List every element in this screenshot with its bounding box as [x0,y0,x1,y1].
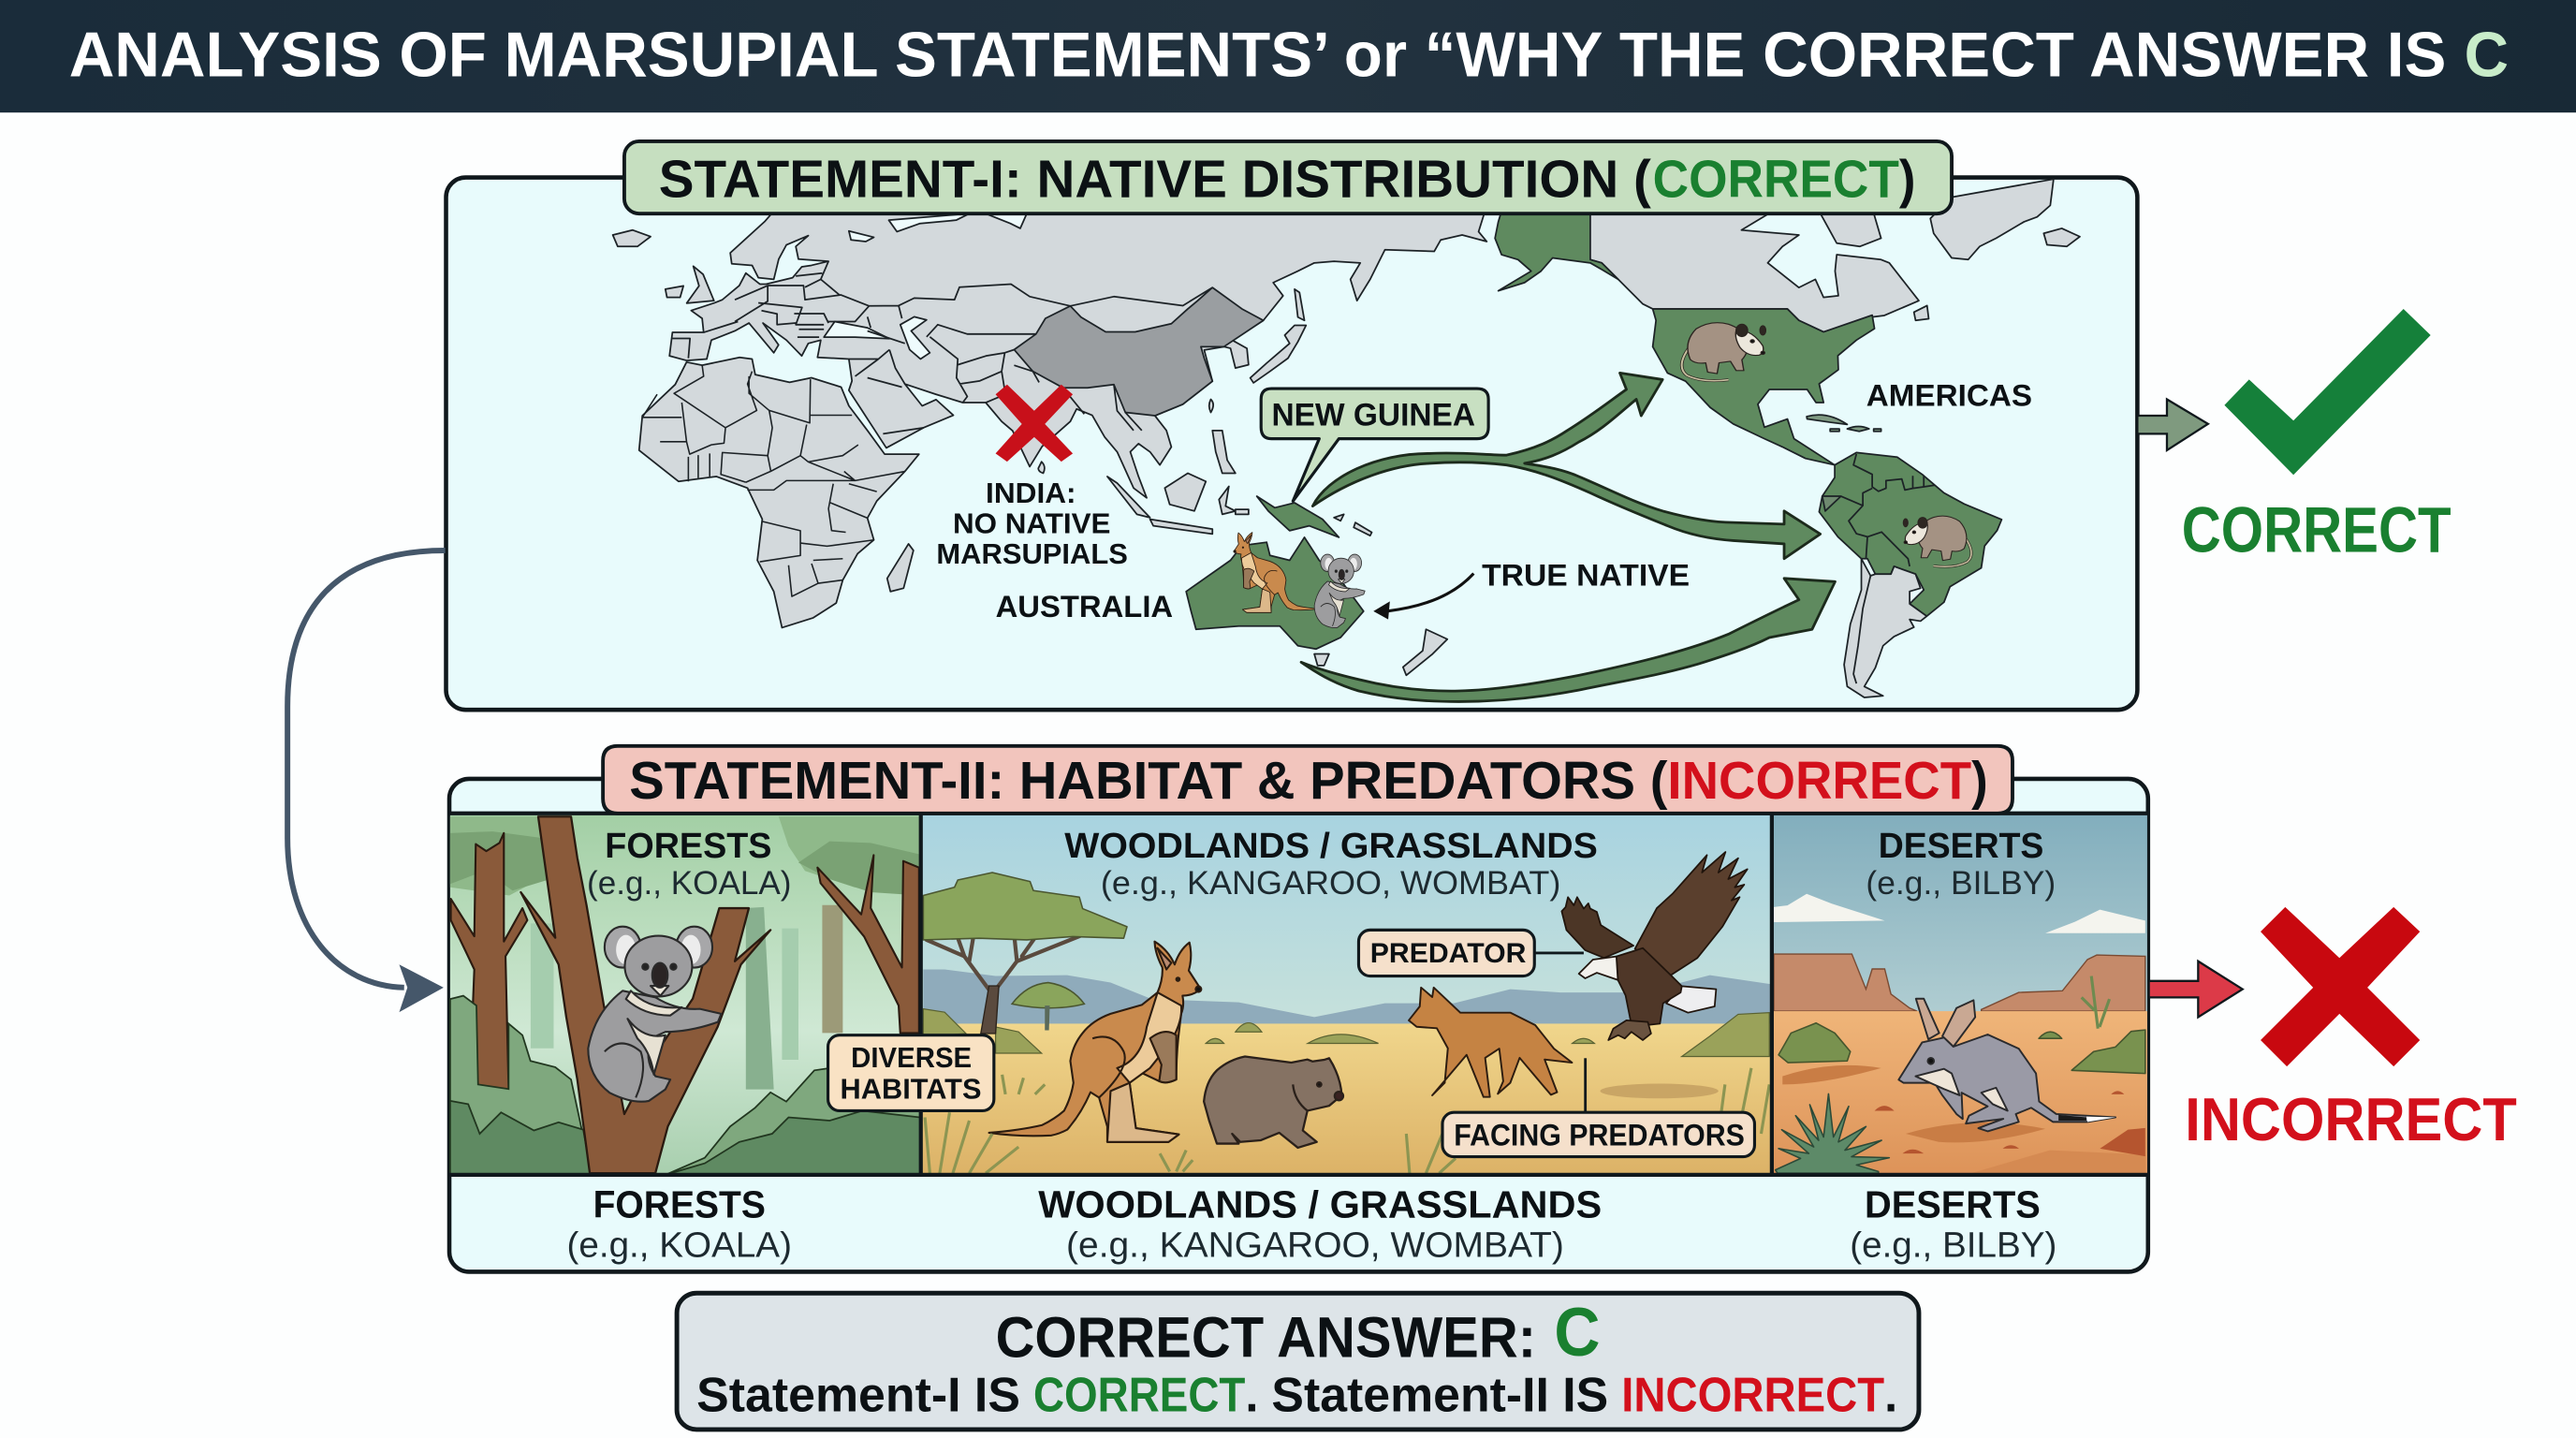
icon: red X [2261,907,2420,1066]
icon: India red X [996,385,1073,462]
icon: kangaroo on Australia [1234,533,1319,612]
caption: forests [567,1183,792,1265]
arrow: to correct [2137,399,2208,450]
map: Eurasia [669,205,1486,498]
forest: koala [588,927,721,1102]
icon: opossum on South America [1903,516,1971,566]
answer summary: CORRECT [1033,1368,1246,1422]
scene frame [449,814,2148,1175]
map: Canada [1577,205,1928,332]
desert: label: (e.g., BILBY) [1866,865,2056,902]
woodland: shrubs and dry patches [923,1009,1769,1057]
callout: predator: PREDATOR [1370,938,1526,969]
heading: statement I: STATEMENT-I: NATIVE DISTRIBUTION ( [659,150,1651,209]
woodland: acacia tree [923,873,1127,1034]
answer summary [696,1368,1897,1422]
connector arrow between statements [287,550,446,1012]
map: Caribbean islands [1807,415,1881,432]
answer summary: . [1884,1368,1897,1422]
heading: statement I [624,141,1952,213]
forest: pale background trunks [531,888,798,1060]
label: Australia: AUSTRALIA [996,590,1173,624]
forest: label: FORESTS [605,826,771,865]
label: true native: TRUE NATIVE [1482,559,1690,593]
map: United States and Central America [1653,309,1875,465]
scene: deserts [1772,815,2147,1175]
callout: New Guinea: NEW GUINEA [1271,398,1475,433]
caption: deserts [1850,1183,2056,1265]
header bar [0,0,2576,112]
desert: label [1866,826,2056,902]
caption: forests: (e.g., KOALA) [567,1225,792,1265]
map: South America south [1844,559,1926,697]
map: Africa [639,358,919,627]
caption: woodlands and grasslands: (e.g., KANGAROO, WOMBAT) [1066,1225,1564,1265]
woodland: label: WOODLANDS / GRASSLANDS [1064,826,1598,865]
label: incorrect: INCORRECT [2185,1085,2517,1153]
answer heading: C [1554,1293,1600,1371]
caption: woodlands and grasslands: WOODLANDS / GRASSLANDS [1038,1183,1602,1226]
answer summary: . [1245,1368,1258,1422]
forest: label [587,826,791,902]
arrow: true native pointer [1373,574,1473,620]
desert: rocks and agave [1776,1091,2145,1173]
callout: New Guinea [1261,389,1488,501]
woodland: dingo [1409,988,1572,1097]
map: South America north [1819,452,2001,616]
map: New Guinea [1257,496,1339,537]
desert: bilby [1898,999,2115,1131]
caption: forests: FORESTS [593,1183,766,1226]
callout: facing predators [1442,1058,1754,1157]
panel: statement II [449,779,2148,1271]
heading: statement I: CORRECT [1653,150,1899,209]
forest: label: (e.g., KOALA) [587,865,791,902]
icon: koala on Australia [1314,554,1365,628]
label: India no native marsupials: NO NATIVE [953,507,1110,540]
map: Africa borders [642,365,905,596]
caption: deserts: (e.g., BILBY) [1850,1225,2056,1265]
label: India no native marsupials: INDIA: [986,477,1076,509]
map: Greenland [1930,179,2054,259]
woodland: kangaroo [989,942,1201,1142]
callout: diverse habitats: DIVERSE [851,1041,972,1074]
callout: diverse habitats [828,1035,994,1110]
map: seas [824,213,1027,359]
map: Ecuador [1822,496,1841,511]
caption: deserts: DESERTS [1865,1183,2041,1226]
icon: green check [2224,309,2431,475]
heading: statement II [603,746,2012,814]
panel: correct answer [677,1293,1919,1430]
heading: statement II: INCORRECT [1667,751,1971,810]
answer summary: Statement-II IS [1271,1368,1608,1422]
woodland: wombat [1204,1057,1343,1148]
callout: predator [1358,930,1584,976]
answer summary: INCORRECT [1621,1368,1884,1422]
answer summary: Statement-I IS [696,1368,1020,1422]
header bar: C [2465,21,2509,91]
map: islands of Asia and Europe [613,230,1306,592]
desert: label: DESERTS [1879,826,2043,865]
label: correct: CORRECT [2182,494,2452,566]
forest: main trunk [520,816,770,1173]
title text: ANALYSIS OF MARSUPIAL STATEMENTS’ or “WHY THE CORRECT ANSWER IS [69,21,2446,91]
world map [613,179,2080,697]
label: India no native marsupials: MARSUPIALS [936,537,1128,570]
icon: opossum on North America [1682,323,1765,381]
map: China [1014,287,1264,416]
forest: undergrowth [450,996,920,1175]
map: small southern islands [1038,228,2080,675]
woodland: label: (e.g., KANGAROO, WOMBAT) [1101,865,1560,902]
map: South America borders [1841,454,1935,566]
callout: facing predators: FACING PREDATORS [1454,1118,1745,1152]
forest: side trees [451,833,919,1089]
heading: statement II: ) [1971,751,1988,810]
scene: woodlands and grasslands [921,815,1772,1175]
callout: diverse habitats: HABITATS [841,1072,981,1105]
arrow: to incorrect [2149,961,2243,1017]
heading: statement I: ) [1899,150,1915,209]
woodland: eagle [1561,852,1748,1040]
map: country borders [672,261,1212,433]
caption: woodlands and grasslands [1038,1183,1602,1265]
map: Alaska [1495,205,1618,291]
map: Australia [1186,537,1364,649]
answer heading: CORRECT ANSWER: [996,1306,1536,1371]
arrow: New Guinea to Americas [1312,373,1821,559]
panel: statement I [446,178,2137,710]
arrow: Australia to South America [1301,579,1835,701]
scene: forests [450,815,920,1175]
label: India no native marsupials [936,477,1128,570]
desert: mound, bushes and cactus [1778,976,2145,1173]
woodland: label [1064,826,1598,902]
map: Chile border [1853,576,1870,683]
woodland: grass tufts [925,1068,1769,1173]
heading: statement II: STATEMENT-II: HABITAT & PREDATORS ( [629,751,1668,810]
label: Americas: AMERICAS [1866,379,2032,413]
